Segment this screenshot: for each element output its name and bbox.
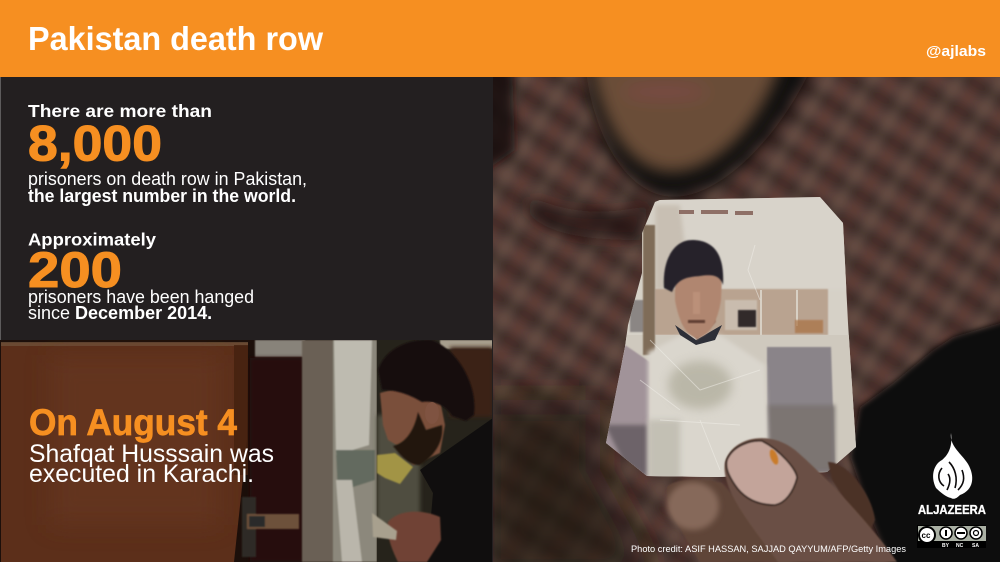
stat: approximately 200: 200	[28, 242, 122, 298]
photo: woman holding portrait	[470, 60, 1000, 562]
hands	[388, 512, 441, 562]
icon: creative commons badge: cc	[922, 531, 931, 540]
stat: more than 8,000: There are more than	[28, 101, 212, 121]
yellow paint patch	[377, 453, 413, 484]
concrete column	[302, 340, 377, 562]
dark hollow around the chin	[585, 60, 815, 197]
icon: creative commons badge: BY	[942, 543, 950, 549]
man	[378, 340, 493, 562]
stat: more than 8,000: prisoners on death row in Pakistan,	[28, 169, 307, 189]
scarf fold shadows	[480, 60, 660, 562]
dark doorway	[250, 358, 304, 562]
dark clothing lower right	[850, 320, 1000, 562]
face	[380, 385, 445, 465]
stat: approximately 200: Approximately	[28, 230, 156, 250]
rusted door	[1, 343, 248, 562]
stat: more than 8,000: the largest number in the world.	[28, 186, 296, 206]
pole	[643, 225, 655, 355]
ear	[430, 402, 436, 404]
thumbnail	[726, 441, 797, 505]
collar shadow	[675, 325, 722, 345]
printed header marks	[679, 210, 753, 215]
stat: more than 8,000	[28, 101, 307, 206]
eyes	[678, 288, 718, 292]
panel: statistics	[0, 77, 493, 340]
second finger	[668, 480, 773, 562]
callout: August 4: Shafqat Husssain was	[29, 440, 274, 468]
scarf plaid fabric	[470, 60, 1000, 562]
stat: more than 8,000: 8,000	[28, 116, 162, 172]
stat: approximately 200: since December 2014.	[28, 303, 212, 323]
back finger	[828, 462, 875, 535]
hair	[664, 240, 723, 292]
hair	[378, 340, 475, 421]
portrait card	[600, 197, 857, 480]
shirt	[648, 335, 770, 480]
shirt	[420, 418, 493, 562]
icon: Al Jazeera logo	[918, 433, 986, 517]
nose and mouth	[694, 292, 700, 314]
neck	[694, 320, 716, 340]
flaking plaster	[372, 513, 397, 540]
right wall	[377, 340, 493, 562]
left figure	[606, 345, 650, 476]
photo: man at rusted door	[0, 340, 493, 562]
wordmark: ALJAZEERA	[918, 503, 986, 517]
thumb	[725, 438, 897, 562]
handle: @ajlabs: @ajlabs	[926, 43, 986, 60]
stat: approximately 200	[28, 230, 254, 323]
pale ground	[622, 335, 857, 480]
background building	[655, 289, 828, 335]
wall top	[255, 340, 305, 357]
hinge	[242, 497, 299, 557]
icon: creative commons badge: NC	[956, 543, 964, 549]
stat: approximately 200: prisoners have been hanged	[28, 287, 254, 307]
icon: creative commons badge: SA	[972, 543, 979, 549]
photo credit: Photo credit: ASIF HASSAN, SAJJAD QAYYUM/AFP/Getty Images	[631, 544, 906, 555]
callout: August 4: On August 4	[29, 402, 237, 443]
callout: August 4	[29, 402, 274, 488]
card upper backdrop	[655, 197, 850, 289]
header bar	[0, 0, 1000, 77]
crease highlights	[640, 245, 760, 470]
grey block	[767, 347, 835, 472]
beard	[393, 412, 442, 465]
icon: creative commons badge	[917, 525, 986, 549]
callout: August 4: executed in Karachi.	[29, 460, 254, 488]
title: Pakistan death row	[28, 20, 323, 57]
woman's face	[590, 60, 782, 172]
face	[675, 266, 722, 338]
